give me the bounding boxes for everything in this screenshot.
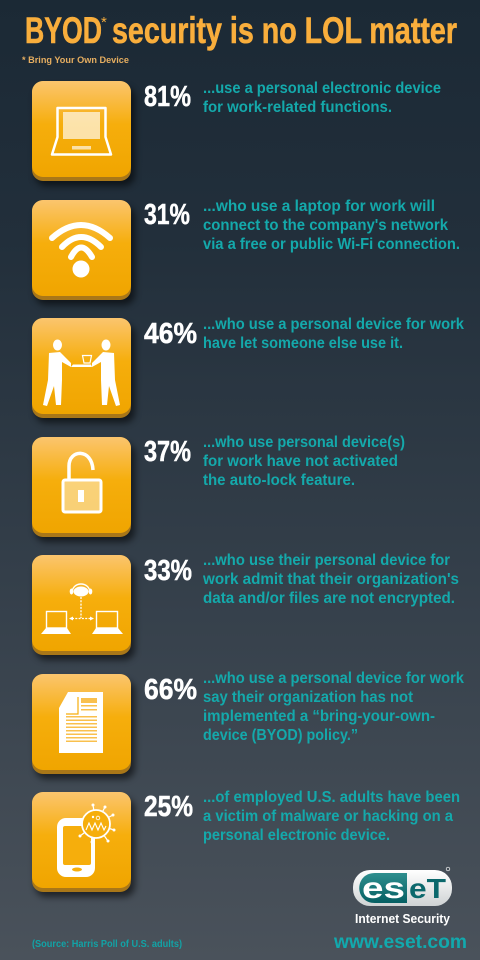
stat: 37%: 37% [144,436,191,468]
text: 37% description: the auto-lock feature. [203,472,355,489]
icon: open padlock [32,437,135,542]
panel: wifi stat [32,198,460,305]
stat: 25%: 25% [144,791,193,823]
text: 66% description: say their organization has not [203,689,414,706]
text: 46% description [203,316,464,352]
text: website: www.eset.com [333,932,467,953]
panel: sharing stat [32,316,464,423]
footnote: * Bring Your Own Device [22,55,129,65]
text: 33% description: work admit that their organization's [202,571,459,588]
icon: wifi [32,200,135,305]
text: 81% description: for work-related functions. [203,99,392,116]
text: 37% description: for work have not activated [203,453,398,470]
text: 66% description: device (BYOD) policy.” [203,727,358,744]
text: 66% description: ...who use a personal device for work [203,670,464,687]
logo: ESET: es [362,872,405,905]
text: 31% description: ...who use a laptop for work will [203,198,435,215]
panel: malware stat [32,789,460,897]
stat: 46%: 46% [144,318,197,350]
text: 33% description [202,552,459,607]
icon: two people sharing a laptop [32,318,135,423]
icon: networked laptops [32,555,135,660]
text: 31% description: via a free or public Wi-Fi connection. [203,236,460,253]
text: 33% description: data and/or files are not encrypted. [203,590,455,607]
text: 66% description: implemented a “bring-your-own- [203,708,435,725]
text: 33% description: ...who use their personal device for [203,552,450,569]
stat: 66%: 66% [144,674,197,706]
text: 46% description: ...who use a personal device for work [203,316,464,333]
stat: 33%: 33% [144,555,192,587]
title: * [101,14,107,31]
text: 37% description [203,434,405,489]
text: 81% description [203,80,441,116]
logo: ESET [353,867,452,906]
text: 25% description: a victim of malware or hacking on a [203,808,453,825]
text: Internet Security: Internet Security [355,912,450,926]
text: 66% description [203,670,464,744]
stat: 81%: 81% [144,81,191,113]
text: 31% description: connect to the company's network [203,217,448,234]
title: BYOD [25,10,102,51]
panel: laptop stat [32,80,441,186]
text: 25% description: personal electronic device. [203,827,390,844]
icon: laptop [32,81,135,186]
panel: auto-lock stat [32,434,405,542]
panel: encryption stat [32,552,459,660]
text: 46% description: have let someone else use it. [203,335,403,352]
text: 25% description: ...of employed U.S. adults have been [203,789,460,806]
logo: ESET: eT [409,873,446,904]
stat: 31%: 31% [144,199,190,231]
icon: document [32,674,135,779]
text: source: (Source: Harris Poll of U.S. adults) [32,939,182,950]
text: 37% description: ...who use personal device(s) [203,434,405,451]
icon: phone with virus [32,792,135,897]
text: 31% description [203,198,460,253]
text: 81% description: ...use a personal electronic device [203,80,441,97]
panel: policy stat [32,670,464,779]
text: 25% description [203,789,460,844]
